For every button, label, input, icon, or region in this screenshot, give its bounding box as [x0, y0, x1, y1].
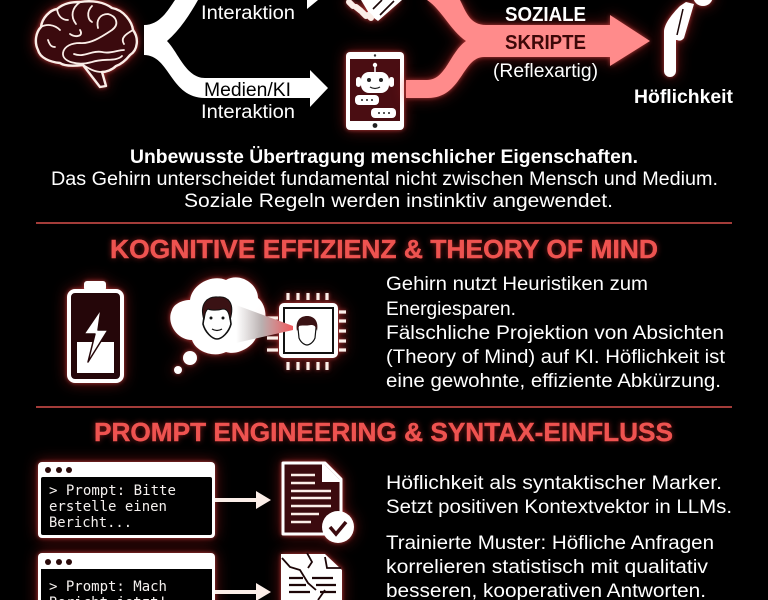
text block: heuristics: Energiesparen. [386, 299, 516, 320]
big face [202, 297, 232, 339]
icon: thought cloud with face [170, 277, 266, 374]
text block: unconscious transfer [51, 147, 718, 212]
robot [356, 63, 394, 93]
icon: chip with projected face [267, 293, 346, 370]
arrow: human interaction [144, 0, 318, 55]
label: Medien/KI: Medien/KI [204, 80, 291, 101]
arrow: media interaction [144, 25, 328, 107]
label: SKRIPTE: SKRIPTE [505, 32, 586, 54]
icon: battery [69, 281, 122, 381]
text block: heuristics: Fälschliche Projektion von Absichten [386, 323, 724, 344]
arrow: projection beam [236, 305, 293, 343]
text block: heuristics: eine gewohnte, effiziente Abkürzung. [386, 371, 721, 392]
terminal: polite prompt: > Prompt: Bitte [49, 483, 176, 499]
label: Interaktion (top): Interaktion [201, 3, 295, 24]
terminal: polite prompt: erstelle einen [49, 499, 167, 515]
terminal: polite prompt [38, 462, 215, 538]
icon: brain [36, 1, 137, 87]
label: Reflexartig: (Reflexartig) [493, 61, 598, 82]
text block: heuristics: Gehirn nutzt Heuristiken zum [386, 274, 648, 295]
label: SOZIALE: SOZIALE [505, 4, 586, 26]
text block: syntax: korrelieren statistisch mit qualitativ [386, 557, 709, 578]
terminal: blunt prompt [38, 553, 215, 600]
icon: tablet with robot [346, 52, 404, 130]
arrow: polite result [215, 491, 271, 509]
terminal: polite prompt: Bericht... [49, 515, 132, 531]
text block: syntax: Trainierte Muster: Höfliche Anfragen [386, 533, 714, 554]
label: Interaktion (bottom): Interaktion [201, 102, 295, 123]
icon: good document [283, 462, 354, 543]
text block: syntax: Höflichkeit als syntaktischer Marker. [386, 473, 722, 494]
arrow: blunt result [215, 583, 271, 600]
text block: heuristics [386, 274, 726, 392]
arrow: branching arrows [144, 0, 328, 107]
icon: broken document [281, 553, 342, 600]
arrow: social scripts flow [406, 0, 650, 98]
heading: cognitive efficiency: KOGNITIVE EFFIZIENZ & THEORY OF MIND [110, 236, 658, 264]
label: Höflichkeit: Höflichkeit [634, 87, 734, 108]
terminal: blunt prompt: > Prompt: Mach [49, 579, 167, 595]
text block: syntax: Setzt positiven Kontextvektor in LLMs. [386, 497, 732, 518]
text block: unconscious transfer: Das Gehirn unterscheidet fundamental nicht zwischen Mensch und Medium. [51, 169, 718, 190]
icon: bowing person [664, 0, 713, 77]
heading: prompt engineering: PROMPT ENGINEERING & SYNTAX-EINFLUSS [94, 419, 673, 447]
text block: unconscious transfer: Soziale Regeln werden instinktiv angewendet. [184, 191, 613, 212]
icon: handshake [349, 0, 402, 21]
text block: unconscious transfer: Unbewusste Übertragung menschlicher Eigenschaften. [130, 147, 638, 168]
text block: syntax [386, 473, 732, 600]
text block: heuristics: (Theory of Mind) auf KI. Höflichkeit ist [386, 347, 726, 368]
